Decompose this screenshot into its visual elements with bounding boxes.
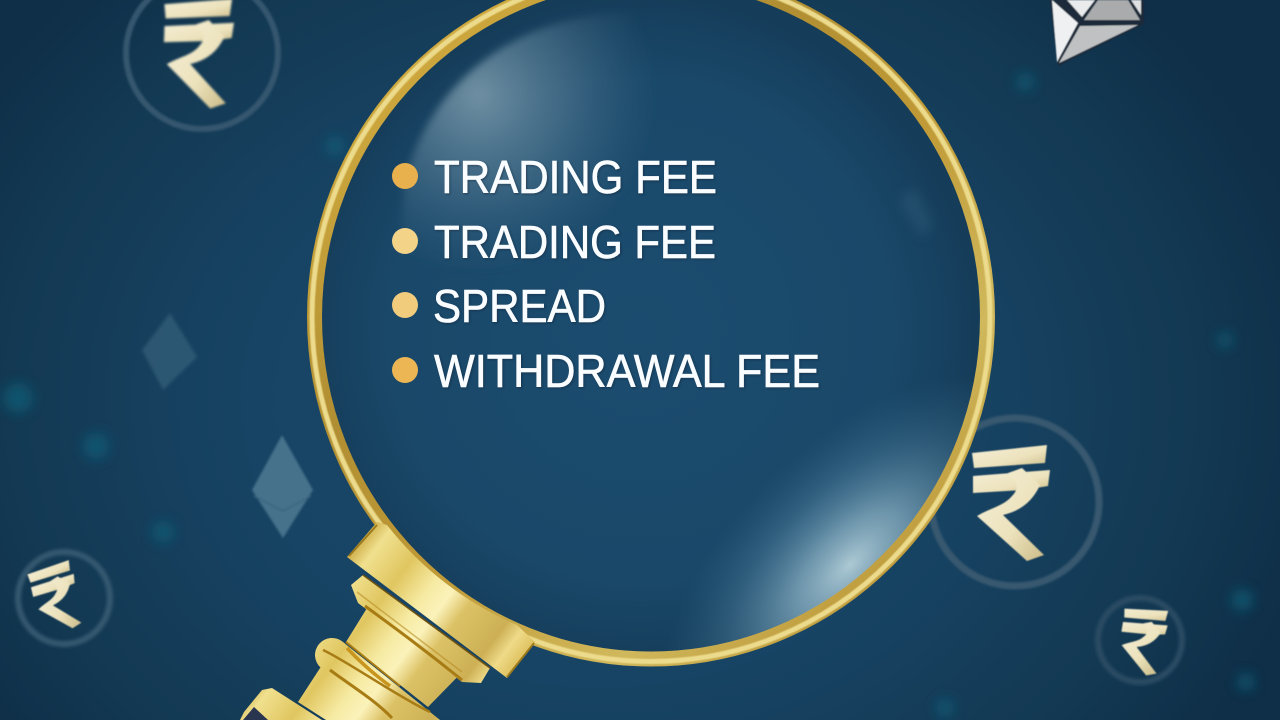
lens glass	[320, 0, 982, 653]
icon: faint ethereum diamond left	[142, 313, 197, 390]
handle collar	[347, 522, 535, 678]
magnifying glass handle	[240, 575, 490, 720]
icon: rupee coin bottom left	[18, 552, 110, 644]
lens gold rim	[312, 0, 990, 662]
item: trading fee repeat: TRADING FEE	[434, 216, 716, 268]
item: spread: SPREAD	[433, 280, 606, 332]
handle ring	[315, 638, 440, 720]
handle band	[351, 575, 490, 683]
bullet list: fee types	[392, 151, 820, 397]
handle upper neck	[346, 600, 472, 707]
lens reflections	[395, 11, 985, 655]
icon: rupee coin lower right, small	[1098, 598, 1182, 682]
item: trading fee: TRADING FEE	[434, 151, 717, 203]
icon: rupee coin right, large	[931, 418, 1099, 586]
item: withdrawal fee: WITHDRAWAL FEE	[434, 345, 820, 397]
icon: ethereum diamond lower left	[252, 435, 313, 538]
handle lower neck	[298, 665, 420, 720]
magnifying glass lens	[312, 0, 990, 662]
icon: ethereum crystal top right	[1050, 0, 1144, 66]
handle end cap	[240, 688, 322, 720]
icon: rupee coin top left	[126, 0, 278, 129]
